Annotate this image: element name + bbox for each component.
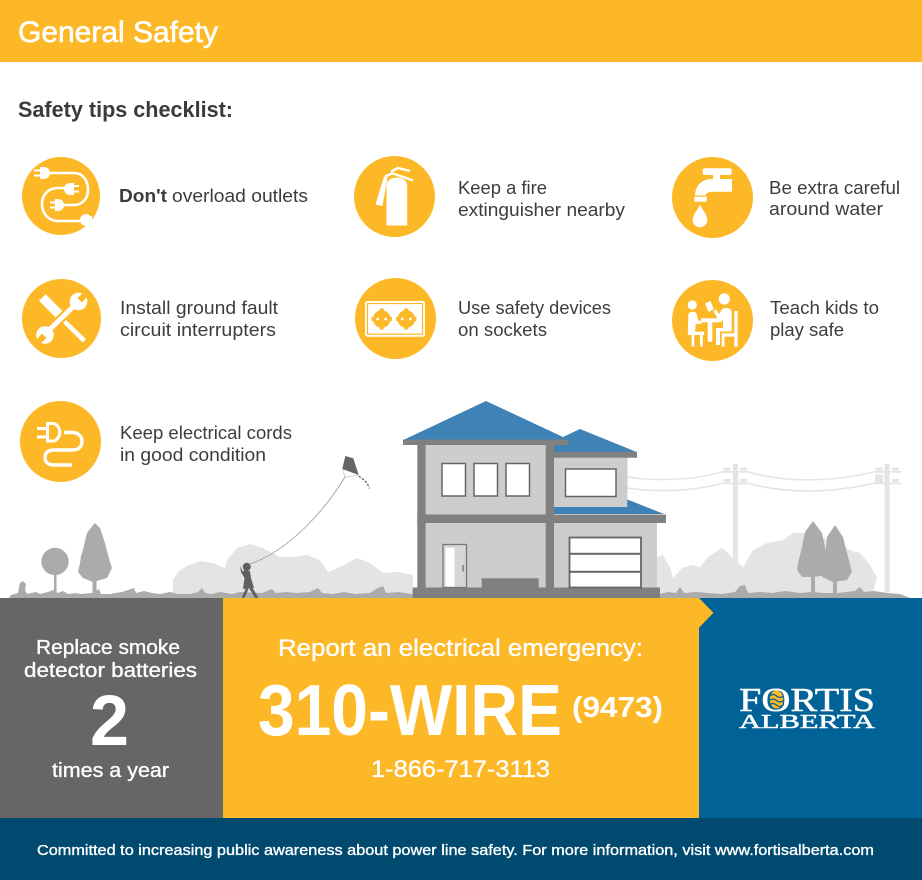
icon: adult and child at table — [672, 280, 753, 361]
tip text: play safe — [770, 320, 844, 340]
tip text: Keep a fire — [458, 178, 547, 198]
house — [403, 401, 666, 598]
child silhouette — [240, 563, 258, 598]
tip text: in good condition — [120, 445, 266, 465]
tip: overload outlets — [22, 157, 308, 235]
logo: Fortis Alberta: ALBERTA — [739, 711, 876, 733]
panel: logo — [699, 598, 922, 818]
tip: teach kids — [672, 280, 879, 361]
kite string — [250, 477, 345, 564]
panel: smoke detector reminder: Replace smoke — [36, 637, 180, 659]
tip text: Install ground fault — [120, 298, 278, 318]
panel: smoke detector reminder: times a year — [52, 760, 169, 782]
tip text — [769, 178, 900, 219]
trees right — [797, 521, 852, 593]
ground foliage — [9, 581, 910, 598]
windows — [442, 464, 616, 496]
panel: emergency number — [223, 598, 699, 818]
tip: fire extinguisher — [354, 156, 625, 237]
header bar — [0, 0, 922, 62]
tip text: around water — [769, 199, 883, 219]
tip text — [119, 186, 308, 206]
background bushes right — [657, 533, 877, 595]
icon: double socket with covers — [355, 278, 436, 359]
power poles and wires — [627, 464, 901, 592]
structure beams — [403, 440, 666, 598]
kite — [342, 456, 359, 475]
rear roof — [554, 429, 636, 452]
logo: Fortis Alberta: FORTIS — [739, 682, 875, 719]
phone number: 310-WIRE — [258, 671, 562, 751]
tip text: Teach kids to — [770, 298, 879, 318]
tip: careful around water — [672, 157, 900, 238]
panel: emergency number: Report an electrical emergency: — [278, 635, 643, 662]
tip text — [458, 178, 625, 220]
page title: General Safety — [18, 16, 218, 49]
tip text: extinguisher nearby — [458, 200, 625, 220]
house walls — [425, 445, 657, 588]
tip text — [770, 298, 879, 340]
tip text: circuit interrupters — [120, 320, 276, 340]
panel: smoke detector reminder: detector batteries — [24, 660, 197, 682]
tip text: Keep electrical cords — [120, 423, 292, 443]
tip text: Be extra careful — [769, 178, 900, 198]
panel: emergency number: 1-866-717-3113 — [371, 756, 550, 783]
footer bar: Committed to increasing public awareness about power line safety. For more information, visit www.fortisalberta.com — [37, 842, 874, 859]
garage door — [570, 538, 641, 588]
porch roof — [554, 500, 664, 514]
trees left — [41, 523, 112, 596]
tip text: Use safety devices — [458, 298, 611, 318]
kite tail — [359, 476, 370, 488]
kite bridle — [342, 469, 358, 477]
checklist heading: Safety tips checklist: — [18, 97, 233, 122]
tip: electrical cords — [20, 401, 292, 482]
front door — [443, 544, 466, 588]
background bushes left — [173, 544, 413, 597]
panel: smoke detector reminder — [0, 598, 223, 818]
child flying kite — [240, 456, 370, 598]
logo: Fortis Alberta — [739, 682, 876, 733]
icon: fire extinguisher — [354, 156, 435, 237]
tip text — [120, 298, 278, 340]
tip text — [458, 298, 611, 340]
tip: safety devices on sockets — [355, 278, 611, 359]
big number: 2 — [90, 682, 129, 761]
scene: neighbourhood illustration — [9, 456, 910, 598]
panel: emergency number: (9473) — [572, 692, 663, 724]
footer bar — [0, 818, 922, 880]
tip: ground fault interrupters — [22, 279, 278, 358]
icon: screwdriver and wrench — [22, 279, 101, 358]
tip text: Don't — [119, 186, 167, 206]
main roof — [403, 401, 563, 440]
tip text: overload outlets — [172, 186, 308, 206]
icon: plug with cord — [20, 401, 101, 482]
notch arrow — [699, 598, 714, 628]
tip text — [120, 423, 292, 465]
tip text: on sockets — [458, 320, 547, 340]
icon: plugs and cords — [22, 157, 100, 235]
icon: dripping tap — [672, 157, 753, 238]
